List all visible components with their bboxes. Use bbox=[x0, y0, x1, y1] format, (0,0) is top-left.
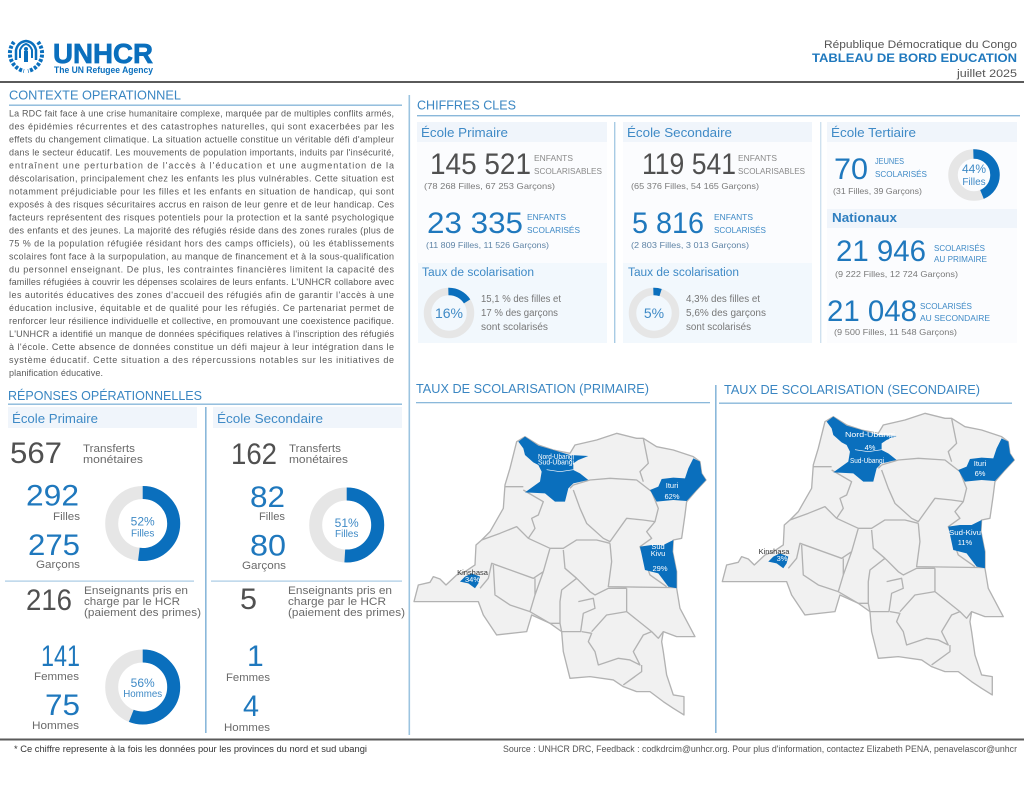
sub-panel: ecole tertiaire: SCOLARISÉS bbox=[875, 170, 927, 179]
heading: chiffres cles: CHIFFRES CLES bbox=[417, 98, 516, 112]
map labels: primaire: Kivu bbox=[651, 549, 665, 558]
sub-panel: reponses ecole secondaire: charge par le HCR bbox=[288, 596, 386, 608]
sub-panel: reponses ecole primaire: 141 bbox=[41, 640, 80, 673]
sub-panel: reponses ecole primaire: 75 bbox=[45, 689, 80, 722]
panel: contexte operationnel bbox=[9, 88, 402, 378]
callout: taux de scolarisation primaire: Taux de scolarisation bbox=[422, 267, 534, 279]
text block: contexte: des enfants et des jeunes. La majorité des réfugiés réside dans des zones rurales (plus de bbox=[9, 225, 394, 235]
sub-panel: chiffres ecole primaire: (11 809 Filles, 11 526 Garçons) bbox=[426, 240, 549, 250]
donut chart: 44% filles: 44% bbox=[962, 162, 986, 176]
sub-panel: reponses ecole primaire: Hommes bbox=[32, 720, 80, 732]
sub-panel: reponses ecole primaire: Femmes bbox=[34, 671, 80, 683]
sub-panel: chiffres ecole primaire: 145 521 bbox=[430, 148, 531, 181]
map labels: secondaire: 6% bbox=[975, 469, 986, 478]
text block: contexte: La RDC fait face à une crise humanitaire complexe, marquée par de multiples conflits armés, bbox=[9, 108, 394, 118]
sub-panel: nationaux: 21 946 bbox=[836, 235, 926, 268]
sub-panel: reponses ecole secondaire: Enseignants pris en bbox=[288, 585, 392, 597]
sub-panel: chiffres ecole secondaire bbox=[623, 122, 812, 343]
logo wordmark: UNHCR bbox=[53, 38, 153, 69]
sub-panel: ecole tertiaire: JEUNES bbox=[875, 157, 904, 166]
sub-panel: reponses ecole secondaire: 1 bbox=[247, 640, 264, 673]
sub-panel: nationaux: AU PRIMAIRE bbox=[934, 255, 987, 264]
text block: contexte: éducation inclusive, équitable et de qualité pour les réfugiés. Ce partenariat permet de bbox=[9, 303, 394, 313]
sub-panel: chiffres ecole primaire: ENFANTS bbox=[527, 213, 566, 222]
text block: contexte: effets du changement climatique. La situation actuelle constitue un véritable défi d'ampleur bbox=[9, 134, 394, 144]
sub-panel: reponses ecole primaire: Garçons bbox=[36, 559, 81, 571]
panel: reponses operationnelles bbox=[5, 388, 405, 734]
map labels: primaire: 29% bbox=[652, 564, 668, 573]
sub-panel: chiffres ecole secondaire: ENFANTS bbox=[738, 154, 777, 163]
map labels: secondaire: Nord-Ubangi bbox=[845, 430, 895, 439]
text block: contexte: système éducatif. Cette situation a des répercussions notables sur les initiatives de bbox=[9, 355, 394, 365]
callout: taux de scolarisation secondaire: 4,3% des filles et bbox=[686, 294, 760, 305]
donut chart: 52% filles: Filles bbox=[131, 528, 154, 540]
callout: taux de scolarisation primaire: sont scolarisés bbox=[481, 322, 548, 333]
sub-panel: reponses ecole secondaire: 5 bbox=[240, 583, 257, 616]
donut chart: 52% filles: 52% bbox=[131, 514, 155, 528]
sub-panel: chiffres ecole secondaire: 119 541 bbox=[642, 148, 736, 181]
text block: contexte: des épidémies récurrentes et des catastrophes naturelles, qui sont exacerbées par les bbox=[9, 122, 394, 132]
sub-panel: reponses ecole secondaire: monétaires bbox=[289, 454, 349, 466]
panel: chiffres cles bbox=[417, 98, 1020, 343]
text block: contexte: familles réfugiées à couvrir les dépenses scolaires de leurs enfants. L'UNHCR collabore avec bbox=[9, 277, 394, 287]
text block: contexte: exposés à des risques sécuritaires accrus en raison de leur genre et de leur handicap. Ces bbox=[9, 199, 395, 209]
map labels: secondaire bbox=[759, 430, 987, 563]
callout: taux de scolarisation primaire bbox=[418, 263, 607, 343]
map labels: primaire: Sud bbox=[651, 542, 665, 551]
sub-panel: reponses ecole primaire: (paiement des primes) bbox=[84, 607, 201, 619]
sub-panel: reponses ecole primaire: 275 bbox=[28, 529, 80, 562]
map labels: primaire: Ituri bbox=[666, 481, 679, 490]
callout: taux de scolarisation primaire: 15,1 % des filles et bbox=[481, 294, 561, 305]
sub-panel: reponses ecole primaire: 292 bbox=[26, 480, 79, 512]
sub-panel: chiffres ecole secondaire: (65 376 Filles, 54 165 Garçons) bbox=[631, 181, 759, 191]
callout: taux de scolarisation secondaire bbox=[623, 263, 812, 343]
sub-panel: chiffres ecole secondaire: SCOLARISABLES bbox=[738, 167, 805, 176]
map labels: primaire: Nord-Ubangi bbox=[538, 452, 574, 461]
donut chart: 44% filles bbox=[953, 154, 995, 196]
text block: contexte: les autorités éducatives des zones d'accueil des réfugiés afin de garantir l'accès à une bbox=[9, 290, 394, 300]
sub-panel: ecole tertiaire: École Tertiaire bbox=[831, 125, 916, 140]
heading: carte primaire: TAUX DE SCOLARISATION (PRIMAIRE) bbox=[416, 382, 649, 396]
sub-panel: reponses ecole secondaire: Femmes bbox=[226, 672, 271, 684]
map labels: primaire: Kinshasa bbox=[457, 568, 489, 577]
map labels: secondaire: 4% bbox=[865, 443, 876, 452]
footnote: * Ce chiffre represente à la fois les données pour les provinces du nord et sud ubangi bbox=[14, 744, 367, 755]
text block: contexte: à l'école. Cette absence de données constitue un défi majeur à leur intégration dans le bbox=[9, 342, 394, 352]
sub-panel: nationaux: (9 222 Filles, 12 724 Garçons) bbox=[835, 269, 958, 279]
sub-panel: nationaux: SCOLARISÉS bbox=[934, 244, 985, 253]
sub-panel: reponses ecole primaire: Enseignants pris en bbox=[84, 585, 188, 597]
sub-panel: reponses ecole primaire: École Primaire bbox=[12, 411, 98, 426]
sub-panel: nationaux: AU SECONDAIRE bbox=[920, 314, 990, 323]
sub-panel: chiffres ecole secondaire: (2 803 Filles, 3 013 Garçons) bbox=[631, 240, 749, 250]
sub-panel: reponses ecole secondaire: 80 bbox=[250, 530, 286, 562]
callout: taux de scolarisation secondaire: Taux de scolarisation bbox=[628, 267, 739, 279]
map labels: secondaire: Kinshasa bbox=[759, 547, 790, 556]
donut chart: 56% hommes bbox=[112, 656, 174, 718]
sub-panel: reponses ecole primaire: Filles bbox=[53, 511, 81, 523]
text block: contexte: L'UNHCR a identifié un manque de données spécifiques relatives à l'inscription des réfugiés bbox=[9, 329, 394, 339]
heading: contexte: CONTEXTE OPERATIONNEL bbox=[9, 88, 181, 102]
sub-panel: chiffres ecole primaire: ENFANTS bbox=[534, 154, 573, 163]
sub-panel: reponses ecole secondaire: Hommes bbox=[224, 722, 271, 734]
sub-panel: reponses ecole primaire: 216 bbox=[26, 584, 72, 617]
text block: contexte: notamment préjudiciable pour les filles et les enfants en situation de handicap, qui sont bbox=[9, 186, 394, 196]
donut chart: 51% filles bbox=[316, 494, 378, 556]
callout: taux de scolarisation primaire: 17 % des garçons bbox=[481, 308, 558, 319]
map labels: secondaire: Sud-Ubangi bbox=[850, 456, 884, 465]
logo tagline: The UN Refugee Agency bbox=[54, 65, 154, 76]
map labels: primaire: 34% bbox=[465, 575, 480, 584]
text block: contexte: scolaires font face à la surpopulation, au manque de financement et à la sous-qualification bbox=[9, 251, 394, 261]
sub-panel: reponses ecole secondaire: Garçons bbox=[242, 560, 287, 572]
sub-panel: nationaux bbox=[827, 209, 1017, 343]
sub-panel: ecole tertiaire: (31 Filles, 39 Garçons) bbox=[833, 186, 922, 196]
sub-panel: reponses ecole secondaire: 82 bbox=[250, 481, 285, 514]
header: report title bbox=[812, 39, 1017, 80]
sub-panel: nationaux: SCOLARISÉS bbox=[920, 302, 972, 311]
sub-panel: chiffres ecole primaire: (78 268 Filles, 67 253 Garçons) bbox=[424, 181, 555, 191]
sub-panel: chiffres ecole primaire bbox=[417, 122, 607, 343]
donut chart: 51% filles: 51% bbox=[335, 516, 359, 530]
sub-panel: reponses ecole secondaire: Transferts bbox=[289, 443, 342, 455]
map labels: secondaire: 11% bbox=[958, 538, 973, 547]
sub-panel: chiffres ecole primaire: École Primaire bbox=[421, 125, 508, 140]
map labels: secondaire: Sud-Kivu bbox=[949, 528, 981, 537]
text block: contexte: 75 % de la population réfugiée résidant hors des camps officiels), où les établissements bbox=[9, 238, 394, 248]
callout: taux de scolarisation secondaire: 5% bbox=[644, 305, 664, 321]
callout: taux de scolarisation secondaire: sont scolarisés bbox=[686, 322, 751, 333]
sub-panel: reponses ecole secondaire: 162 bbox=[231, 438, 277, 471]
text block: contexte: du personnel enseignant. De plus, les contraintes financières limitent la capacité des bbox=[9, 264, 394, 274]
sub-panel: chiffres ecole secondaire: ENFANTS bbox=[714, 213, 753, 222]
sub-panel: chiffres ecole secondaire: SCOLARISÉS bbox=[714, 226, 766, 235]
callout: taux de scolarisation primaire: 16% bbox=[435, 305, 463, 321]
sub-panel: reponses ecole secondaire: 4 bbox=[243, 690, 259, 723]
text block: contexte: renforcer leur résilience individuelle et collective, en promouvant une coexistence pacifique. bbox=[9, 316, 394, 326]
text block: contexte bbox=[9, 108, 395, 378]
map labels: primaire: 62% bbox=[664, 492, 680, 501]
sub-panel: nationaux: Nationaux bbox=[832, 211, 897, 225]
header: report title: juillet 2025 bbox=[956, 68, 1017, 80]
sub-panel: reponses ecole primaire: charge par le HCR bbox=[84, 596, 180, 608]
sub-panel: chiffres ecole secondaire: École Secondaire bbox=[627, 125, 732, 140]
donut chart: 56% hommes: Hommes bbox=[123, 689, 162, 700]
header: report title: TABLEAU DE BORD EDUCATION bbox=[812, 51, 1017, 65]
sub-panel: chiffres ecole primaire: 23 335 bbox=[427, 207, 523, 240]
header: report title: République Démocratique du Congo bbox=[824, 39, 1017, 51]
text block: contexte: planification éducative. bbox=[9, 368, 103, 378]
sub-panel: reponses ecole primaire: monétaires bbox=[83, 454, 144, 466]
sub-panel: reponses ecole secondaire: École Secondaire bbox=[217, 411, 323, 426]
sub-panel: reponses ecole secondaire: Filles bbox=[259, 511, 286, 523]
sub-panel: reponses ecole primaire: Transferts bbox=[83, 443, 136, 455]
sub-panel: reponses ecole secondaire bbox=[213, 407, 405, 734]
sub-panel: reponses ecole primaire: 567 bbox=[10, 437, 62, 470]
text block: contexte: facteurs représentent des risques potentiels pour la protection et la santé psychologique bbox=[9, 212, 394, 222]
sub-panel: chiffres ecole secondaire: 5 816 bbox=[632, 207, 704, 240]
sub-panel: nationaux: 21 048 bbox=[827, 295, 917, 328]
sub-panel: chiffres ecole primaire: SCOLARISÉS bbox=[527, 226, 580, 235]
callout: taux de scolarisation secondaire: 5,6% des garçons bbox=[686, 308, 766, 319]
heading: carte secondaire: TAUX DE SCOLARISATION (SECONDAIRE) bbox=[724, 383, 980, 397]
sub-panel: ecole tertiaire bbox=[827, 122, 1017, 209]
text block: contexte: entraînent une perturbation de l'accès à l'éducation et une augmentation de la bbox=[9, 160, 394, 170]
sub-panel: chiffres ecole primaire: SCOLARISABLES bbox=[534, 167, 602, 176]
donut chart: 56% hommes: 56% bbox=[131, 676, 155, 690]
map: primaire bbox=[414, 433, 706, 715]
panel: carte taux secondaire bbox=[719, 383, 1014, 695]
map: secondaire bbox=[722, 413, 1014, 695]
sub-panel: reponses ecole secondaire: (paiement des primes) bbox=[288, 607, 405, 619]
source line: Source : UNHCR DRC, Feedback : codkdrcim@unhcr.org. Pour plus d'information, contactez Elizabeth PENA, penavelascor@unhcr bbox=[503, 744, 1017, 754]
map labels: primaire: Sud-Ubangi bbox=[538, 458, 574, 466]
text block: contexte: déscolarisation, principalement chez les enfants les plus vulnérables. Cette situation est bbox=[9, 173, 394, 183]
heading: reponses: RÉPONSES OPÉRATIONNELLES bbox=[8, 388, 202, 403]
map labels: secondaire: Ituri bbox=[974, 459, 987, 468]
sub-panel: reponses ecole primaire bbox=[8, 407, 201, 732]
logo: UNHCR bbox=[10, 38, 154, 76]
donut chart: 44% filles: Filles bbox=[962, 177, 986, 188]
donut chart: 52% filles bbox=[112, 492, 174, 554]
map labels: secondaire: 3% bbox=[777, 554, 788, 563]
sub-panel: ecole tertiaire: 70 bbox=[834, 153, 868, 186]
icon: UNHCR wreath and shelter bbox=[10, 41, 42, 71]
panel: carte taux primaire bbox=[414, 382, 710, 715]
text block: contexte: dans le secteur éducatif. Les mouvements de population importants, induits par l'insécurité, bbox=[9, 147, 394, 157]
donut chart: 51% filles: Filles bbox=[335, 529, 358, 540]
sub-panel: nationaux: (9 500 Filles, 11 548 Garçons) bbox=[834, 327, 957, 337]
map labels: primaire bbox=[457, 452, 680, 584]
